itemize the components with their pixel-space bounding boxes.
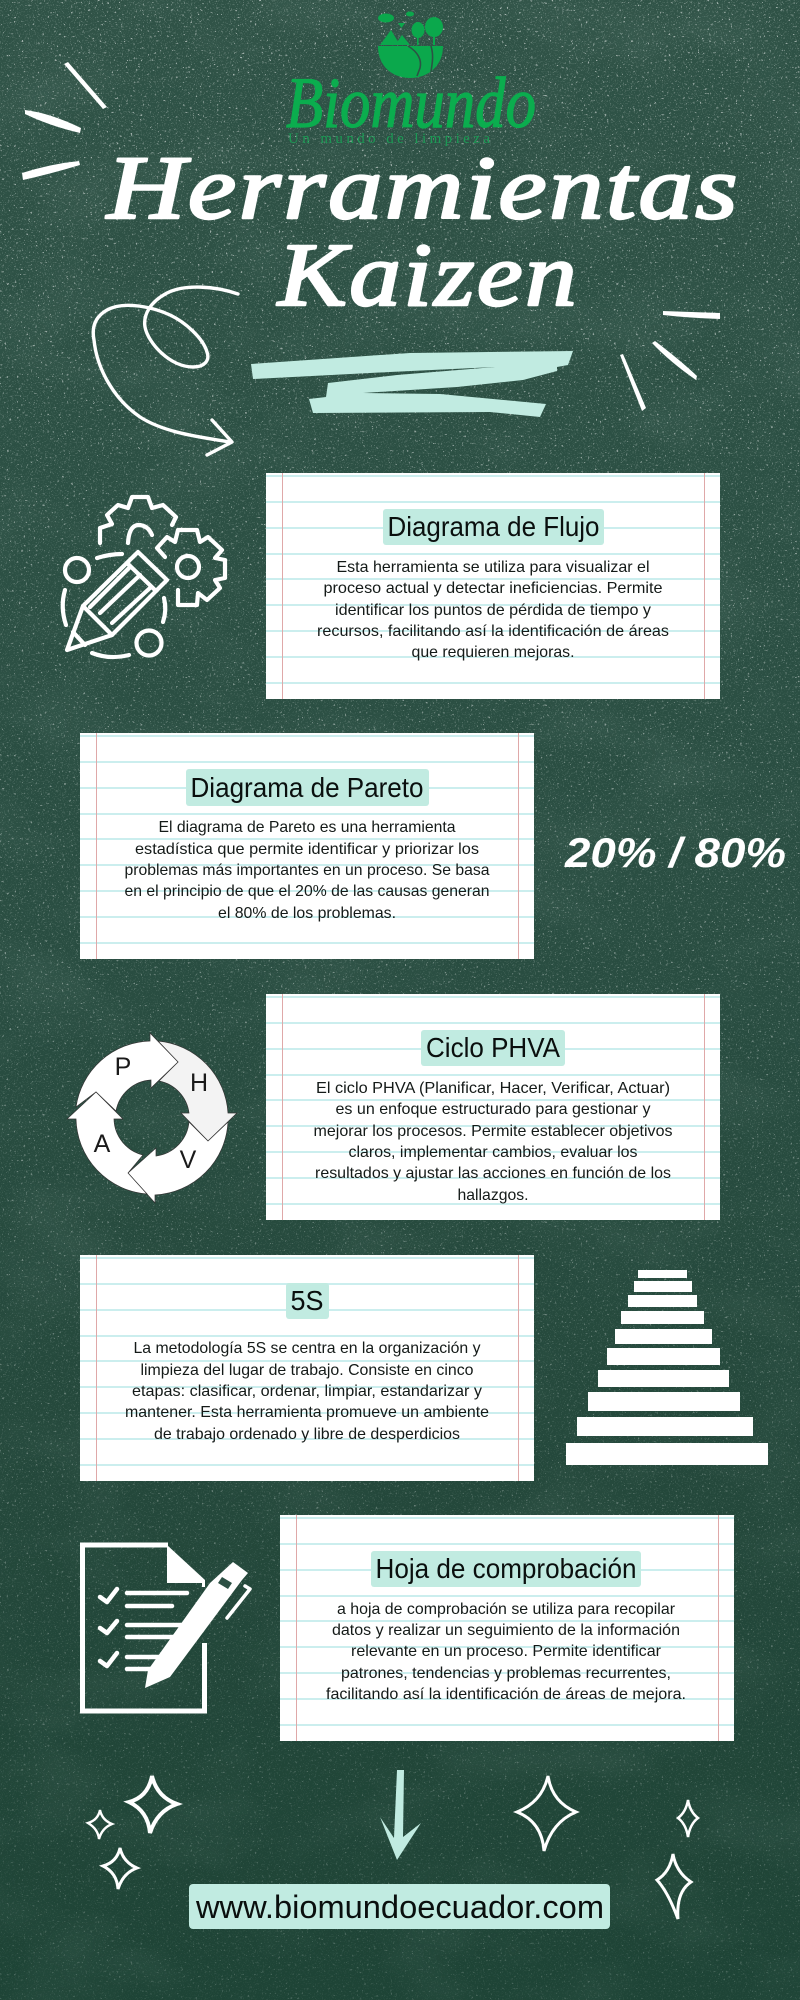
body text: que requieren mejoras. [412,644,574,661]
large gear [100,497,176,543]
arrow V [128,1122,228,1203]
body text: a hoja de comprobación se utiliza para recopilar [337,1601,676,1618]
heading: 5S: 5S [290,1285,324,1316]
body text: El diagrama de Pareto es una herramienta [158,819,456,836]
cycle letters: A [94,1130,111,1158]
title: Kaizen [276,226,579,325]
panel: Ciclo PHVA [266,994,720,1220]
sparkles left [88,1776,177,1889]
body text: limpieza del lugar de trabajo. Consiste en cinco [140,1362,474,1379]
body text: claros, implementar cambios, evaluar los [348,1144,638,1161]
curly arrow [93,287,238,455]
body text [326,1601,686,1703]
pencil [67,552,167,650]
body text [124,819,490,922]
body text: proceso actual y detectar ineficiencias. Permite [324,580,663,597]
heading: Hoja de comprobación: Hoja de comprobación [376,1553,636,1584]
heading: Diagrama de Pareto: Diagrama de Pareto [190,772,424,803]
panel: Hoja de comprobación [280,1515,734,1741]
body text: recursos, facilitando así la identificación de áreas [317,623,669,640]
body text: patrones, tendencias y problemas recurrentes, [341,1665,671,1682]
logo: Biomundo [286,12,536,147]
title [106,139,740,325]
body text: el 80% de los problemas. [218,905,396,922]
arrow H [158,1041,237,1141]
cycle letters [94,1053,208,1174]
panel: Diagrama de Flujo [266,473,720,699]
small gear [157,530,225,605]
panel: 5S [80,1255,534,1481]
body text: hallazgos. [458,1187,528,1204]
icon: staircase pyramid [566,1270,768,1465]
dashed ring arcs [97,554,122,558]
body text: relevante en un proceso. Permite identificar [351,1643,662,1660]
body text [314,1080,672,1204]
body text: La metodología 5S se centra en la organización y [134,1340,480,1357]
heading: 5S [286,1283,329,1319]
title: Herramientas [106,139,740,238]
body text [125,1340,489,1443]
arrow P [76,1033,178,1111]
body text: Esta herramienta se utiliza para visualizar el [336,559,650,576]
body text: resultados y ajustar las acciones en función de los [315,1165,671,1182]
small circles [65,558,89,582]
stat: 20% / 80%: 20% / 80% [564,829,786,876]
logo tagline: Un mundo de limpieza [288,131,490,147]
icon: PHVA cycle [67,1033,237,1203]
pen [145,1562,248,1688]
body text [317,559,669,661]
decorative chalk dashes right [620,311,720,411]
sparkles right [517,1776,698,1919]
body text: identificar los puntos de pérdida de tiempo y [335,602,651,619]
arrow down [380,1770,421,1860]
body text: estadística que permite identificar y priorizar los [135,841,479,858]
body text: mantener. Esta herramienta promueve un ambiente [125,1404,489,1421]
panel: Diagrama de Pareto [80,733,534,959]
body text: es un enfoque estructurado para gestionar y [336,1101,650,1118]
body text: en el principio de que el 20% de las causas generan [124,883,490,900]
logo icon: bowl with trees [378,12,443,78]
body text: datos y realizar un seguimiento de la información [332,1622,680,1639]
cycle letters: P [115,1053,131,1081]
heading: Diagrama de Flujo: Diagrama de Flujo [388,511,600,542]
body text: El ciclo PHVA (Planificar, Hacer, Verificar, Actuar) [316,1080,670,1097]
logo name: Biomundo [286,63,536,143]
body text: mejorar los procesos. Permite establecer objetivos [314,1123,672,1140]
mint scribble underline [251,351,573,417]
decorative chalk dashes top left [22,62,107,180]
body text: de trabajo ordenado y libre de desperdicios [154,1426,460,1443]
heading: Ciclo PHVA: Ciclo PHVA [426,1032,560,1063]
cycle letters: H [190,1069,208,1097]
icon: pencil and gears [63,497,225,657]
arrow A [67,1092,147,1194]
body text: etapas: clasificar, ordenar, limpiar, estandarizar y [132,1383,482,1400]
cycle letters: V [180,1146,197,1174]
body text: problemas más importantes en un proceso. Se basa [124,862,490,879]
body text: facilitando así la identificación de áreas de mejora. [326,1686,686,1703]
website link: www.biomundoecuador.com [195,1889,604,1925]
icon: checklist and pen [82,1545,250,1711]
